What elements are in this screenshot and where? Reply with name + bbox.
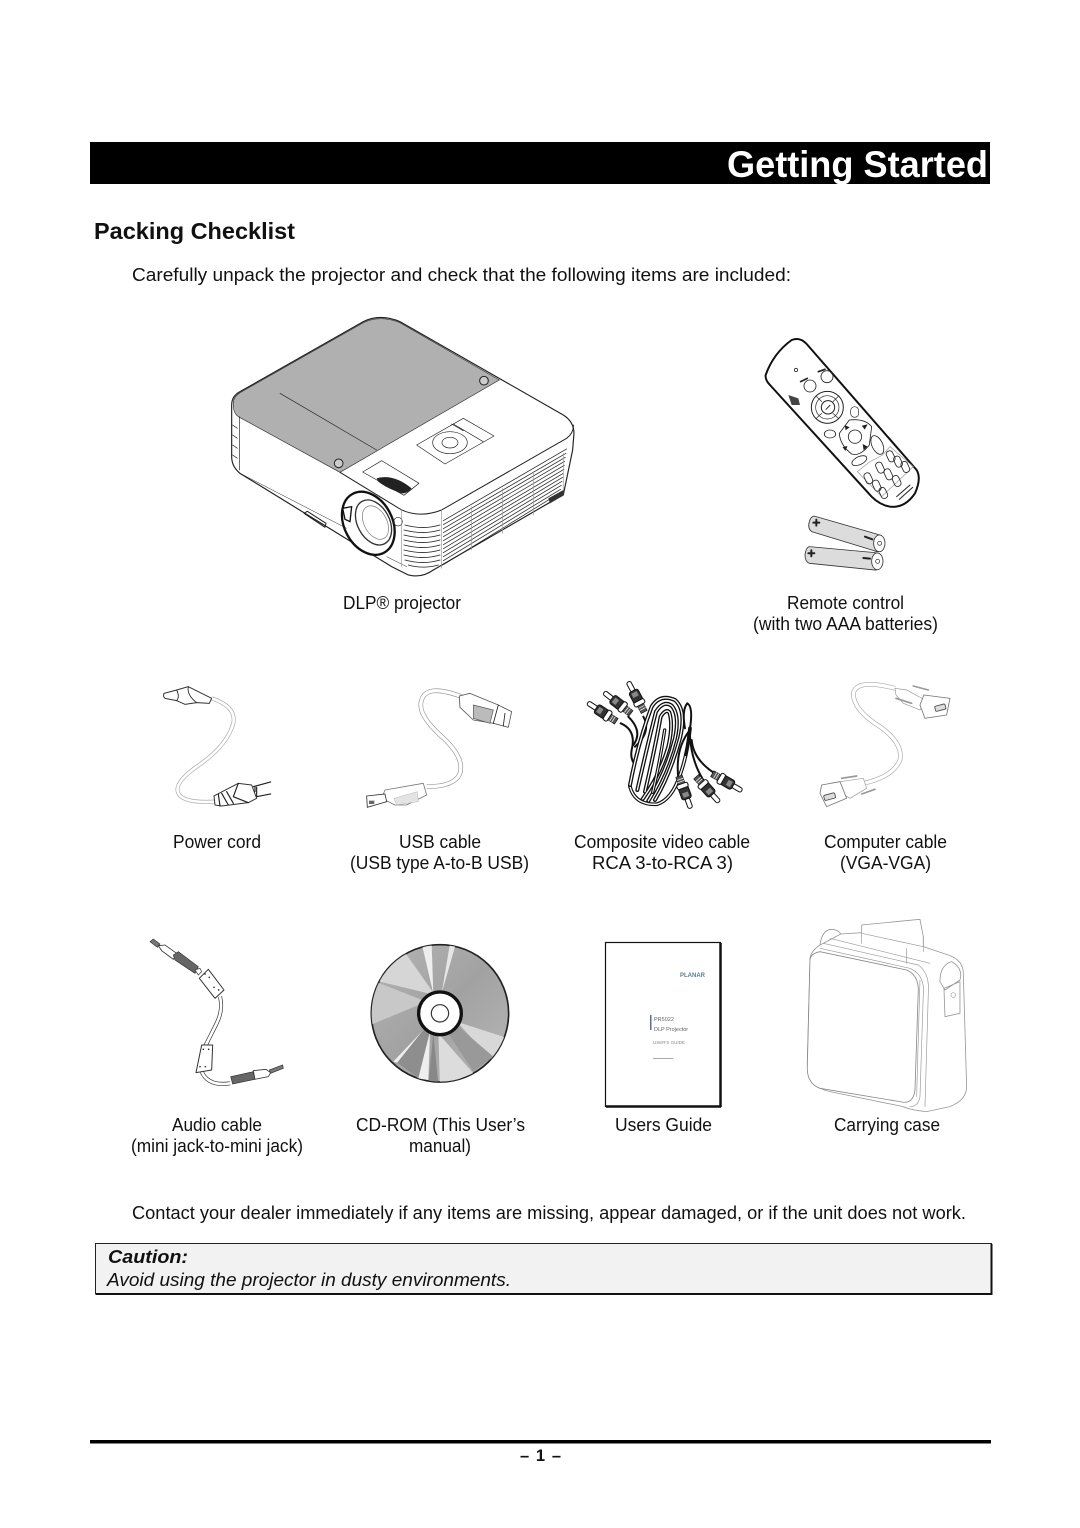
icon: power cord	[164, 687, 271, 806]
icon: composite video cable	[585, 679, 745, 810]
label: composite video cable: RCA 3-to-RCA 3)	[592, 852, 733, 873]
contact notice: Contact your dealer immediately if any items are missing, appear damaged, or if the unit does not work.	[132, 1202, 966, 1223]
icon: users guide booklet: PLANAR	[680, 973, 706, 979]
label: DLP projector: DLP® projector	[343, 592, 461, 613]
label: CD-ROM	[356, 1114, 525, 1156]
label: audio cable: Audio cable	[172, 1114, 262, 1135]
label: carrying case: Carrying case	[834, 1114, 940, 1135]
label: composite video cable	[574, 831, 750, 873]
label: CD-ROM: CD-ROM (This User’s	[356, 1114, 525, 1135]
icon: remote control and batteries	[766, 339, 919, 570]
label: USB cable: (USB type A-to-B USB)	[350, 852, 529, 873]
icon: computer cable	[820, 684, 950, 807]
label: audio cable: (mini jack-to-mini jack)	[131, 1135, 303, 1156]
icon: CD-ROM	[367, 943, 513, 1087]
label: computer cable: (VGA-VGA)	[840, 852, 931, 873]
battery	[805, 547, 882, 570]
icon: users guide booklet	[606, 942, 721, 1107]
label: users guide: Users Guide	[615, 1114, 712, 1135]
label: remote control: (with two AAA batteries)	[753, 613, 938, 634]
title bar	[90, 142, 990, 185]
icon: users guide booklet: USER'S GUIDE	[653, 1040, 685, 1045]
label: USB cable: USB cable	[399, 831, 481, 852]
icon: audio cable	[150, 939, 283, 1084]
caution box: Caution:	[108, 1246, 188, 1267]
label: remote control	[753, 592, 938, 634]
icon: carrying case	[807, 919, 967, 1112]
intro text: Carefully unpack the projector and check that the following items are included:	[132, 264, 791, 285]
icon: users guide booklet: PR5022	[654, 1017, 674, 1023]
icon: DLP projector	[232, 317, 574, 576]
remote body	[766, 339, 919, 507]
label: computer cable	[824, 831, 947, 873]
label: remote control: Remote control	[787, 592, 904, 613]
title bar: Getting Started	[727, 143, 988, 185]
label: computer cable: Computer cable	[824, 831, 947, 852]
battery	[809, 516, 884, 552]
page number: – 1 –	[520, 1447, 561, 1465]
footer rule	[90, 1440, 991, 1444]
label: CD-ROM: manual)	[409, 1135, 471, 1156]
label: composite video cable: Composite video cable	[574, 831, 750, 852]
label: USB cable	[350, 831, 529, 873]
label: power cord: Power cord	[173, 831, 261, 852]
label: audio cable	[131, 1114, 303, 1156]
icon: users guide booklet: DLP Projector	[654, 1027, 688, 1033]
section heading: Packing Checklist	[94, 218, 295, 244]
caution box: Avoid using the projector in dusty environments.	[106, 1269, 511, 1290]
caution box	[96, 1244, 992, 1295]
icon: USB cable	[367, 691, 512, 807]
